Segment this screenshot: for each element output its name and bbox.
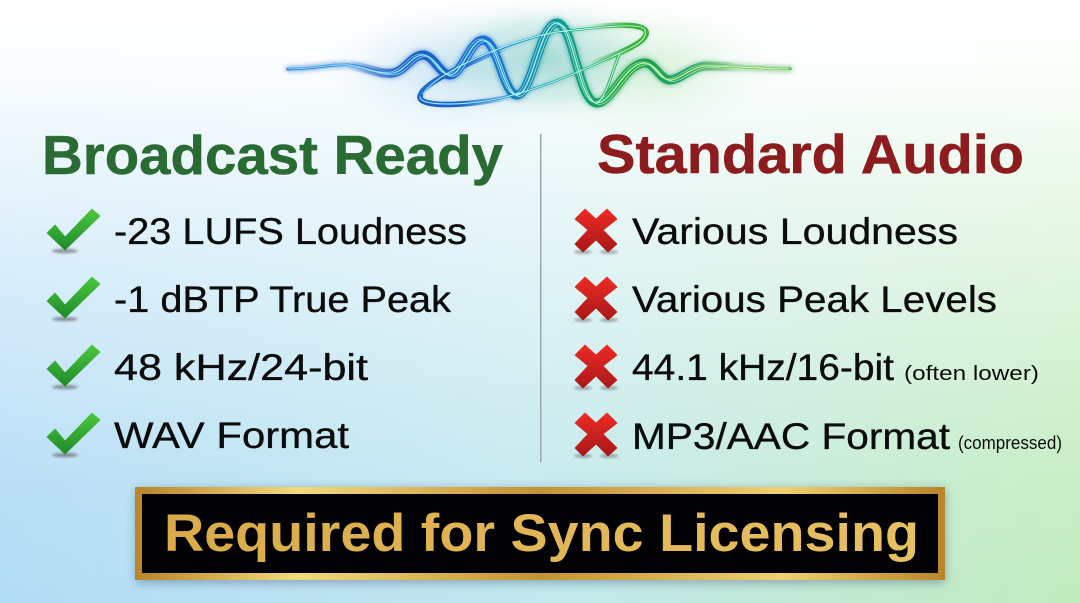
item: 44.1 kHz/16-bit <box>574 345 1039 390</box>
item: WAV Format: WAV Format <box>114 415 350 456</box>
item: -1 dBTP True Peak: -1 dBTP True Peak <box>114 279 452 320</box>
waveform graphic <box>286 22 792 105</box>
panel: standard audio list <box>574 209 1062 458</box>
item: Various Loudness <box>574 209 958 254</box>
item: 44.1 kHz/16-bit: (often lower) <box>904 363 1039 385</box>
heading: Broadcast Ready: Broadcast Ready <box>42 124 503 186</box>
column divider <box>540 134 542 462</box>
item: WAV Format <box>47 413 350 457</box>
heading: Standard Audio: Standard Audio <box>597 123 1024 185</box>
banner: Required for Sync Licensing: Required for Sync Licensing <box>164 504 919 563</box>
item: -23 LUFS Loudness: -23 LUFS Loudness <box>114 211 467 252</box>
item: Various Peak Levels: Various Peak Levels <box>632 279 997 320</box>
item: Various Loudness: Various Loudness <box>632 211 958 252</box>
item: MP3/AAC Format <box>574 413 1062 458</box>
banner: Required for Sync Licensing <box>135 487 945 583</box>
item: 48 kHz/24-bit: 48 kHz/24-bit <box>114 347 369 388</box>
item: 44.1 kHz/16-bit: 44.1 kHz/16-bit <box>632 347 895 388</box>
item: 48 kHz/24-bit <box>47 345 369 389</box>
panel: broadcast ready list <box>47 209 467 457</box>
item: MP3/AAC Format: MP3/AAC Format <box>632 416 951 457</box>
item: MP3/AAC Format: (compressed) <box>958 433 1062 453</box>
